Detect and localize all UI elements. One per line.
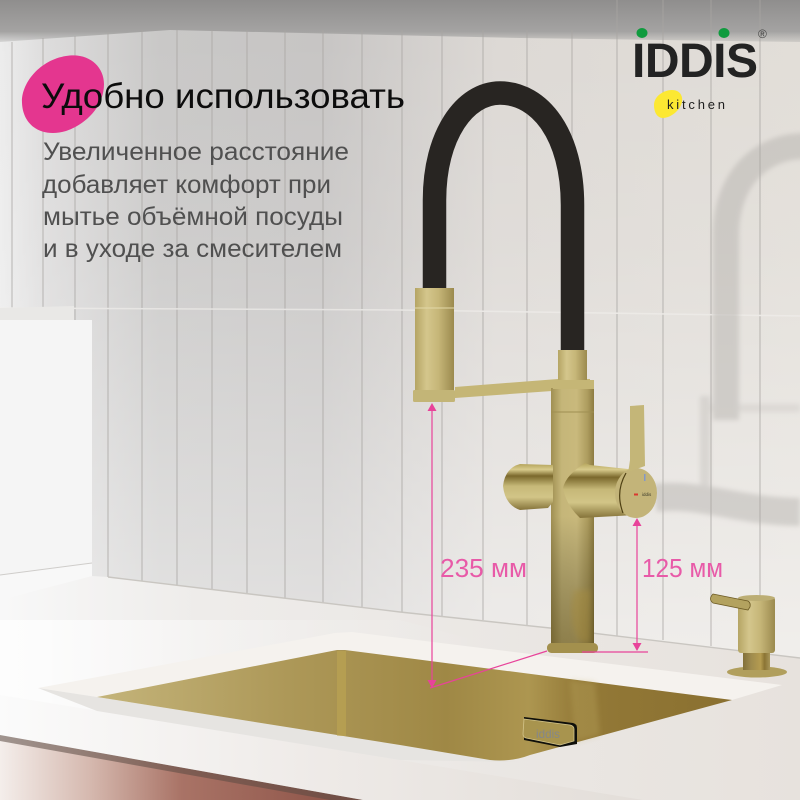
countertop <box>0 576 800 800</box>
body text: и в уходе за смесителем <box>43 235 342 263</box>
soap dispenser <box>710 594 787 678</box>
235 mm arrow <box>428 403 547 688</box>
body text: мытье объёмной посуды <box>43 203 343 231</box>
sink bronze basin <box>97 650 732 760</box>
sink rim <box>38 632 782 700</box>
sink lower lip <box>38 688 520 762</box>
valve end cap: iddis <box>642 492 652 497</box>
logo <box>632 27 767 118</box>
wall shadows of faucet <box>655 146 800 512</box>
logo wordmark: IDDIS <box>632 35 758 88</box>
lower cabinet front <box>0 735 363 800</box>
label 125 mm: 125 мм <box>642 555 723 583</box>
body text: Увеличенное расстояние <box>43 138 349 166</box>
125 mm arrow <box>582 518 648 652</box>
registered mark: ® <box>758 27 767 41</box>
right valve cylinder <box>563 463 637 518</box>
white appliance cabinet at left <box>0 306 92 600</box>
spout collar <box>558 350 587 380</box>
body text <box>42 138 349 263</box>
kitchen label: kitchen <box>667 97 725 112</box>
valve end cap <box>615 468 657 518</box>
sink drain badge: iddis <box>536 727 560 741</box>
left cross valve <box>503 464 553 510</box>
body text: добавляет комфорт при <box>42 171 331 199</box>
spout arm <box>455 379 590 398</box>
faucet body column <box>551 380 594 644</box>
spray head <box>413 288 455 402</box>
black pull-down hose <box>434 93 572 352</box>
sink drain badge <box>523 717 577 747</box>
dark shadow under counter <box>0 733 385 800</box>
counter front edge <box>0 695 643 800</box>
yellow blob <box>654 90 682 118</box>
heading pink blob <box>22 55 104 133</box>
heading: Удобно использовать <box>41 77 405 116</box>
faucet base ring <box>547 643 598 653</box>
measurement annotations <box>428 403 723 688</box>
label 235 mm: 235 мм <box>440 555 527 583</box>
faucet <box>413 93 657 653</box>
logo green dots <box>636 28 730 38</box>
lever handle <box>628 405 645 472</box>
